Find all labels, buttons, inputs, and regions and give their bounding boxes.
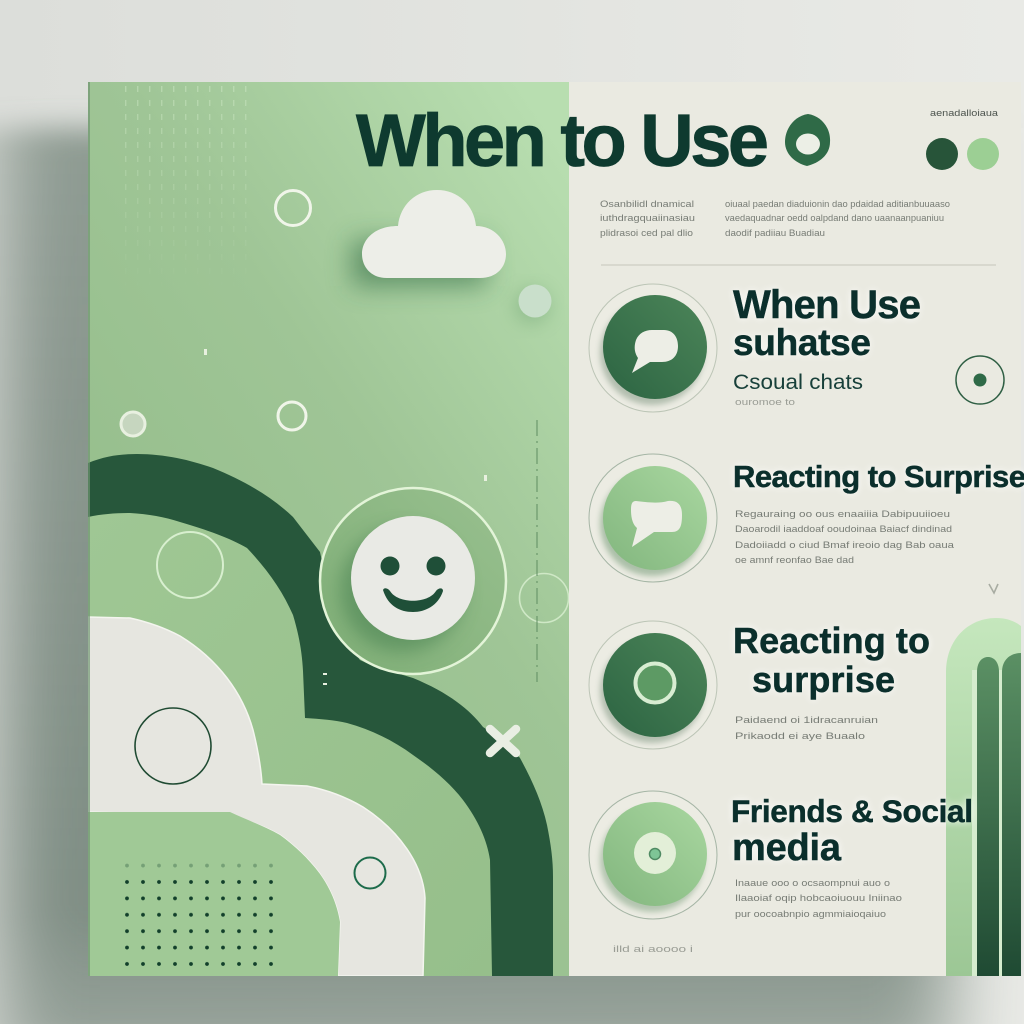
intro text: left column: Osanbilidl dnamical xyxy=(600,199,694,210)
body text: Regauraing oo ous enaaiiia Dabipuuiioeu xyxy=(735,509,950,520)
panel: left green illustration xyxy=(88,82,569,976)
cloud icon xyxy=(352,190,506,286)
intro text: right column: daodif padiiau Buadiau xyxy=(725,228,825,239)
body text: Daoarodil iaaddoaf ooudoinaa Baiacf dindinad xyxy=(735,524,952,535)
dark green curved band xyxy=(88,454,553,976)
footer small label: illd ai aoooo i xyxy=(613,944,693,955)
body text: Inaaue ooo o ocsaompnui auo o xyxy=(735,878,890,889)
body text xyxy=(735,878,902,920)
body text: Paidaend oi 1idracanruian xyxy=(735,715,878,726)
icon: speech bubble on light circle xyxy=(589,454,717,582)
body text: pur oocoabnpio agmmiaioqaiuo xyxy=(735,909,886,920)
lower green area xyxy=(88,812,340,976)
mid green shape xyxy=(88,513,492,976)
item 1: when use xyxy=(589,283,1004,412)
heading second line: surprise xyxy=(752,659,895,700)
small top-right label: aenadalloiaua xyxy=(930,108,998,118)
icon: speech bubble on dark circle xyxy=(589,284,717,412)
panel background xyxy=(88,82,569,976)
faint dot grid xyxy=(125,86,246,218)
panel background xyxy=(569,82,1021,976)
heading: When Use xyxy=(733,283,921,327)
divider xyxy=(601,264,996,266)
smiley with ring xyxy=(320,488,506,674)
body text xyxy=(735,509,955,566)
icon: small chevron xyxy=(989,584,998,593)
open circle: on white shape xyxy=(135,708,211,784)
intro text: left column xyxy=(600,199,695,239)
heading second line: suhatse xyxy=(733,322,871,363)
heading: Reacting to Surprise xyxy=(733,459,1024,494)
panel left edge line xyxy=(88,82,90,976)
caption: ouromoe to xyxy=(735,397,795,407)
heading: Friends & Social xyxy=(731,793,973,829)
title: When to Use xyxy=(356,99,769,182)
icon: ring on dark circle xyxy=(589,621,717,749)
item 2: reacting to surprise xyxy=(589,454,1024,593)
intro text: left column: plidrasoi ced pal dlio xyxy=(600,228,693,239)
white cloud-like shape xyxy=(88,617,425,976)
open circle: mid left xyxy=(157,532,223,598)
intro text: right column: oiuaal paedan diaduionin dao pdaidad aditianbuuaaso xyxy=(725,199,950,210)
intro text: right column xyxy=(725,199,950,239)
palette dots xyxy=(926,138,999,170)
subheading: Csoual chats xyxy=(733,371,863,394)
item 4: friends and social media xyxy=(589,791,973,920)
dot matrix xyxy=(125,864,273,966)
heading second line: media xyxy=(732,827,842,869)
body text: Dadoiiadd o ciud Bmaf ireoio dag Bab oaua xyxy=(735,540,955,551)
body text: oe amnf reonfao Bae dad xyxy=(735,555,854,566)
body text xyxy=(735,715,878,742)
open circle: middle white xyxy=(278,402,306,430)
body text: Prikaodd ei aye Buaalo xyxy=(735,731,865,742)
panel: right information column xyxy=(569,82,1021,976)
open circle: lower teal xyxy=(354,858,386,888)
small ball: left xyxy=(121,412,145,436)
heading: Reacting to xyxy=(733,620,930,661)
open circle: right edge xyxy=(520,574,568,622)
item 3: reacting to surprise xyxy=(589,620,930,749)
body text: Ilaaoiaf oqip hobcaoiuouu Iniinao xyxy=(735,893,902,904)
small ball: right xyxy=(514,284,552,324)
small marks xyxy=(204,349,487,685)
icon: target xyxy=(956,356,1004,404)
icon: bullseye on light circle xyxy=(589,791,717,919)
decorative vertical bars xyxy=(946,618,1021,976)
intro text: right column: vaedaquadnar oedd oalpdand dano uaanaanpuaniuu xyxy=(725,213,944,224)
open circle: top white xyxy=(276,190,310,226)
intro text: left column: iuthdragquaiinasiau xyxy=(600,213,695,224)
dashed vertical line xyxy=(536,420,538,682)
x mark icon xyxy=(490,729,516,753)
icon: title blob xyxy=(785,114,830,166)
